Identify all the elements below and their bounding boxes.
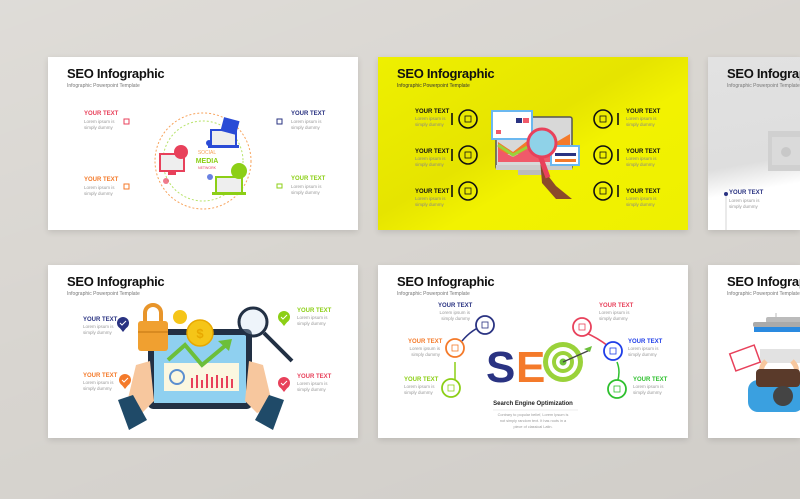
panel: slide 5 SEO: simply dummy (404, 390, 433, 395)
slide 2 subtitle: Infographic Powerpoint Template (397, 83, 470, 89)
slide 5 left text items (438, 302, 472, 321)
monitor graphic with magnifier and icon circles (451, 109, 619, 201)
slide 3 text item: YOUR TEXT (729, 190, 763, 196)
SEO letters, target, connectors: not simply random text. It has roots in a (500, 419, 567, 423)
text: bottom left: Lorem ipsum is (84, 185, 115, 190)
text: top left (84, 110, 118, 130)
slide 5 right text items: YOUR TEXT (599, 303, 633, 309)
right text items: YOUR TEXT (626, 109, 660, 115)
slide 1 subtitle: Infographic Powerpoint Template (67, 83, 140, 89)
right text items: Lorem ipsum is (626, 156, 657, 161)
panel: slide 5 SEO: YOUR TEXT (404, 377, 438, 383)
slide 5 left text items: Lorem ipsum is (439, 310, 470, 315)
left text items: simply dummy (415, 162, 444, 167)
text: bottom right: Lorem ipsum is (291, 184, 322, 189)
panel: slide 5 SEO: simply dummy (633, 390, 662, 395)
panel: slide 4 tablet: simply dummy (297, 387, 326, 392)
text: top right: simply dummy (291, 125, 320, 130)
slide 3 text item (729, 190, 764, 209)
panel: slide 4 tablet: YOUR TEXT (297, 374, 331, 380)
panel: slide 4 tablet: simply dummy (83, 386, 112, 391)
slide 4 subtitle: Infographic Powerpoint Template (67, 291, 140, 297)
text: top left: Lorem ipsum is (84, 119, 115, 124)
text: top right (291, 110, 326, 130)
panel: slide 5 SEO: Lorem ipsum is (404, 384, 435, 389)
slide 6 person at desk illustration (728, 313, 800, 412)
left text items: YOUR TEXT (415, 109, 449, 115)
social media network graphic: MEDIA (196, 158, 218, 165)
right text items: Lorem ipsum is (626, 196, 657, 201)
text: top right: Lorem ipsum is (291, 119, 322, 124)
left text items: simply dummy (415, 202, 444, 207)
panel: slide 5 SEO: YOUR TEXT (408, 339, 442, 345)
SEO letters, target, connectors: Search Engine Optimization (493, 401, 573, 407)
tablet with hands, lock, coins, magnifier: $ (196, 326, 204, 341)
right text items: simply dummy (626, 122, 655, 127)
slide 5 right text items: simply dummy (599, 316, 628, 321)
text items slide 4 (83, 316, 118, 335)
social media network graphic: NETWORK (198, 166, 217, 170)
panel: slide 4 tablet: Lorem ipsum is (297, 381, 328, 386)
slide 5 left text items: YOUR TEXT (438, 303, 472, 309)
panel: slide 5 SEO: simply dummy (411, 352, 440, 357)
panel: slide 4 tablet: Lorem ipsum is (83, 380, 114, 385)
panel: slide 4 tablet: YOUR TEXT (83, 373, 117, 379)
text: bottom left (84, 176, 118, 196)
panel: slide 5 SEO: YOUR TEXT (628, 339, 662, 345)
SEO letters, target, connectors: piece of classical Latin. (513, 425, 553, 429)
slide 5 title: SEO Infographic (397, 274, 494, 289)
text: top left: simply dummy (84, 125, 113, 130)
panel: slide 2 yellow (378, 57, 688, 230)
text: bottom right: simply dummy (291, 190, 320, 195)
panel: slide 4 tablet: simply dummy (297, 321, 326, 326)
tablet with hands, lock, coins, magnifier (117, 303, 294, 430)
text items slide 4: simply dummy (83, 330, 112, 335)
left text items: YOUR TEXT (415, 189, 449, 195)
panel: slide 4 tablet: YOUR TEXT (297, 308, 331, 314)
text: bottom right: YOUR TEXT (291, 176, 325, 182)
text items slide 4: Lorem ipsum is (83, 324, 114, 329)
right text items: simply dummy (626, 202, 655, 207)
text: bottom left: simply dummy (84, 191, 113, 196)
text items slide 4: YOUR TEXT (83, 317, 117, 323)
right text items (626, 108, 660, 207)
panel: slide 6 partial (708, 265, 800, 438)
slide 3 text item: simply dummy (729, 204, 758, 209)
panel: slide 5 SEO: Lorem ipsum is (409, 346, 440, 351)
social media network graphic: SOCIAL (198, 150, 216, 156)
social media network graphic (124, 112, 282, 210)
left text items: YOUR TEXT (415, 149, 449, 155)
right text items: YOUR TEXT (626, 189, 660, 195)
slide 3 faded monitor (724, 131, 800, 230)
SEO letters, target, connectors (441, 315, 627, 429)
panel: slide 5 SEO: Lorem ipsum is (633, 384, 664, 389)
left text items: Lorem ipsum is (415, 116, 446, 121)
right text items: simply dummy (626, 162, 655, 167)
left text items: Lorem ipsum is (415, 156, 446, 161)
slide 6 subtitle: Infographic Powerpoint Template (727, 291, 800, 297)
slide 1 title: SEO Infographic (67, 66, 164, 81)
right text items: YOUR TEXT (626, 149, 660, 155)
slide 5 left text items: simply dummy (441, 316, 470, 321)
slide 5 right text items (599, 302, 634, 321)
slide 5 subtitle: Infographic Powerpoint Template (397, 291, 470, 297)
left text items: simply dummy (415, 122, 444, 127)
SEO letters, target, connectors: E (516, 343, 545, 392)
text: bottom right (291, 176, 326, 195)
left text items (415, 108, 450, 207)
panel: slide 5 SEO: YOUR TEXT (633, 377, 667, 383)
text: top right: YOUR TEXT (291, 111, 325, 117)
left text items: Lorem ipsum is (415, 196, 446, 201)
slide 2 title: SEO Infographic (397, 66, 494, 81)
text: top left: YOUR TEXT (84, 111, 118, 117)
panel: slide 5 SEO: simply dummy (628, 352, 657, 357)
panel: slide 5 SEO: Lorem ipsum is (628, 346, 659, 351)
slide 5 right text items: Lorem ipsum is (599, 310, 630, 315)
panel: slide 4 tablet (48, 265, 358, 438)
slide 3 subtitle: Infographic Powerpoint Template (727, 83, 800, 89)
SEO letters, target, connectors: S (486, 343, 515, 392)
panel: slide 1 social media (48, 57, 358, 230)
slide 4 title: SEO Infographic (67, 274, 164, 289)
SEO letters, target, connectors: Contrary to popular belief, Lorem Ipsum is (498, 413, 568, 417)
slide 3 text item: Lorem ipsum is (729, 198, 760, 203)
panel: slide 4 tablet: Lorem ipsum is (297, 315, 328, 320)
right text items: Lorem ipsum is (626, 116, 657, 121)
panel: slide 3 partial (708, 57, 800, 230)
panel: slide 5 SEO (378, 265, 688, 438)
text: bottom left: YOUR TEXT (84, 177, 118, 183)
